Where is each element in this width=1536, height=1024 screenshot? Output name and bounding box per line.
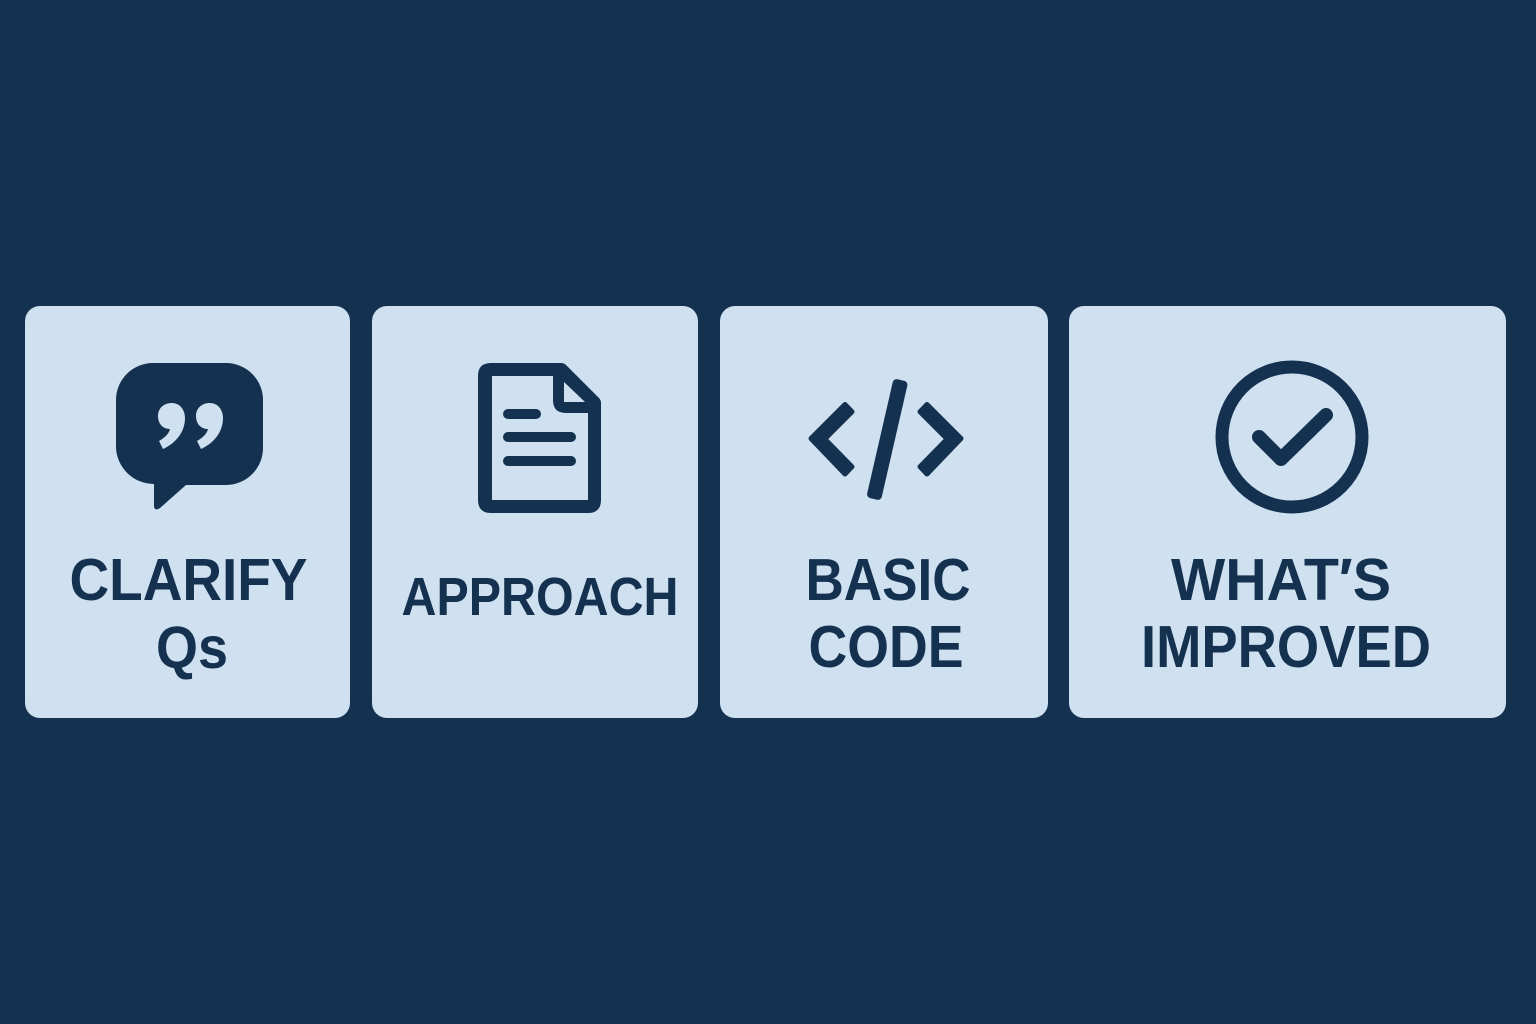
label: basic: BASIC [806,547,970,613]
label: what's: WHAT′S [1171,547,1391,613]
icon: code brackets [811,383,961,496]
label: approach: APPROACH [402,567,678,627]
icon: check circle [1222,367,1362,507]
panel: basic code [720,306,1048,718]
label: code: CODE [808,614,964,680]
panel: what's improved [1069,306,1506,718]
panel: approach [372,306,698,718]
label: improved: IMPROVED [1141,614,1431,680]
panel: clarify questions [25,306,350,718]
label: Qs: Qs [156,615,228,681]
label: clarify: CLARIFY [70,547,308,613]
icon: speech bubble with quotes [116,363,263,509]
icon: document [478,363,601,513]
